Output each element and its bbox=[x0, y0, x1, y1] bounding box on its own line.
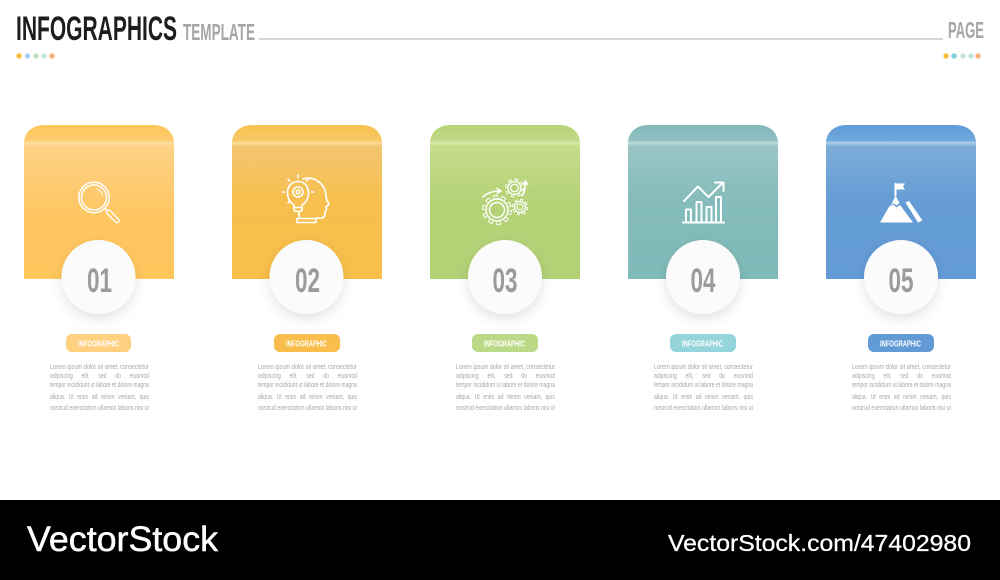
icon: rising bar chart bbox=[683, 182, 724, 222]
left dots bbox=[16, 53, 55, 59]
icon: magnifying glass bbox=[79, 182, 117, 220]
text block bbox=[852, 362, 952, 412]
card bbox=[232, 125, 382, 279]
icon: mountain with flag bbox=[880, 183, 922, 222]
panel: step 01 bbox=[24, 125, 174, 412]
text block: tempor incididunt ut labore et dolore magna bbox=[852, 380, 952, 389]
text block: tempor incididunt ut labore et dolore magna bbox=[258, 380, 358, 389]
text block: adipiscing elit, sed do eiusmod bbox=[50, 371, 149, 380]
number badge: 05 bbox=[888, 262, 914, 300]
text block: tempor incididunt ut labore et dolore magna bbox=[654, 380, 754, 389]
text block: aliqua. Ut enim ad minim veniam, quis bbox=[50, 392, 149, 401]
card bbox=[24, 125, 174, 279]
text block: tempor incididunt ut labore et dolore magna bbox=[50, 380, 150, 389]
text block: aliqua. Ut enim ad minim veniam, quis bbox=[258, 392, 357, 401]
label pill bbox=[670, 334, 736, 352]
number badge: 01 bbox=[87, 262, 112, 300]
text block bbox=[654, 362, 754, 412]
label pill: INFOGRAPHIC bbox=[286, 338, 327, 348]
text block: adipiscing elit, sed do eiusmod bbox=[258, 371, 357, 380]
footer logo: VectorStock bbox=[27, 520, 219, 559]
panel: step 04 bbox=[628, 125, 778, 412]
label pill bbox=[868, 334, 934, 352]
label pill: INFOGRAPHIC bbox=[484, 338, 525, 348]
number badge bbox=[468, 240, 542, 314]
text block: adipiscing elit, sed do eiusmod bbox=[654, 371, 753, 380]
number badge bbox=[864, 240, 938, 314]
card bbox=[826, 125, 976, 279]
text block: nostrud exercitation ullamco laboris nisi ut bbox=[852, 403, 952, 412]
title: INFOGRAPHICS bbox=[16, 10, 177, 48]
text block bbox=[456, 362, 556, 412]
panel: step 05 bbox=[826, 125, 976, 412]
card bbox=[430, 125, 580, 279]
label pill: INFOGRAPHIC bbox=[880, 338, 921, 348]
card bbox=[628, 125, 778, 279]
text block: aliqua. Ut enim ad minim veniam, quis bbox=[852, 392, 951, 401]
subtitle: TEMPLATE bbox=[183, 19, 255, 45]
text block bbox=[258, 362, 358, 412]
panel: step 03 bbox=[430, 125, 580, 412]
icon: head with light bulb bbox=[282, 175, 329, 222]
number badge: 03 bbox=[492, 262, 518, 300]
panel: step 02 bbox=[232, 125, 382, 412]
text block: nostrud exercitation ullamco laboris nisi ut bbox=[258, 403, 358, 412]
text block: nostrud exercitation ullamco laboris nisi ut bbox=[50, 403, 150, 412]
header bbox=[16, 10, 984, 59]
text block: aliqua. Ut enim ad minim veniam, quis bbox=[654, 392, 753, 401]
label pill: INFOGRAPHIC bbox=[78, 338, 119, 348]
text block: Lorem ipsum dolor sit amet, consectetur bbox=[258, 362, 357, 371]
footer bar bbox=[0, 500, 1000, 580]
text block: aliqua. Ut enim ad minim veniam, quis bbox=[456, 392, 555, 401]
number badge bbox=[62, 240, 136, 314]
icon: gears with arrows bbox=[483, 180, 528, 222]
label pill: INFOGRAPHIC bbox=[682, 338, 723, 348]
right dots bbox=[943, 53, 981, 59]
label pill bbox=[274, 334, 340, 352]
footer url: VectorStock.com/47402980 bbox=[668, 530, 971, 556]
text block: nostrud exercitation ullamco laboris nisi ut bbox=[654, 403, 754, 412]
number badge: 02 bbox=[295, 262, 320, 300]
text block bbox=[50, 362, 150, 412]
text block: nostrud exercitation ullamco laboris nisi ut bbox=[456, 403, 556, 412]
number badge bbox=[270, 240, 344, 314]
text block: tempor incididunt ut labore et dolore magna bbox=[456, 380, 556, 389]
number badge: 04 bbox=[690, 262, 716, 300]
text block: Lorem ipsum dolor sit amet, consectetur bbox=[456, 362, 555, 371]
label pill bbox=[66, 334, 131, 352]
label pill bbox=[472, 334, 538, 352]
text block: adipiscing elit, sed do eiusmod bbox=[456, 371, 555, 380]
text block: Lorem ipsum dolor sit amet, consectetur bbox=[852, 362, 951, 371]
text block: Lorem ipsum dolor sit amet, consectetur bbox=[654, 362, 753, 371]
text block: adipiscing elit, sed do eiusmod bbox=[852, 371, 951, 380]
number badge bbox=[666, 240, 740, 314]
text block: Lorem ipsum dolor sit amet, consectetur bbox=[50, 362, 149, 371]
